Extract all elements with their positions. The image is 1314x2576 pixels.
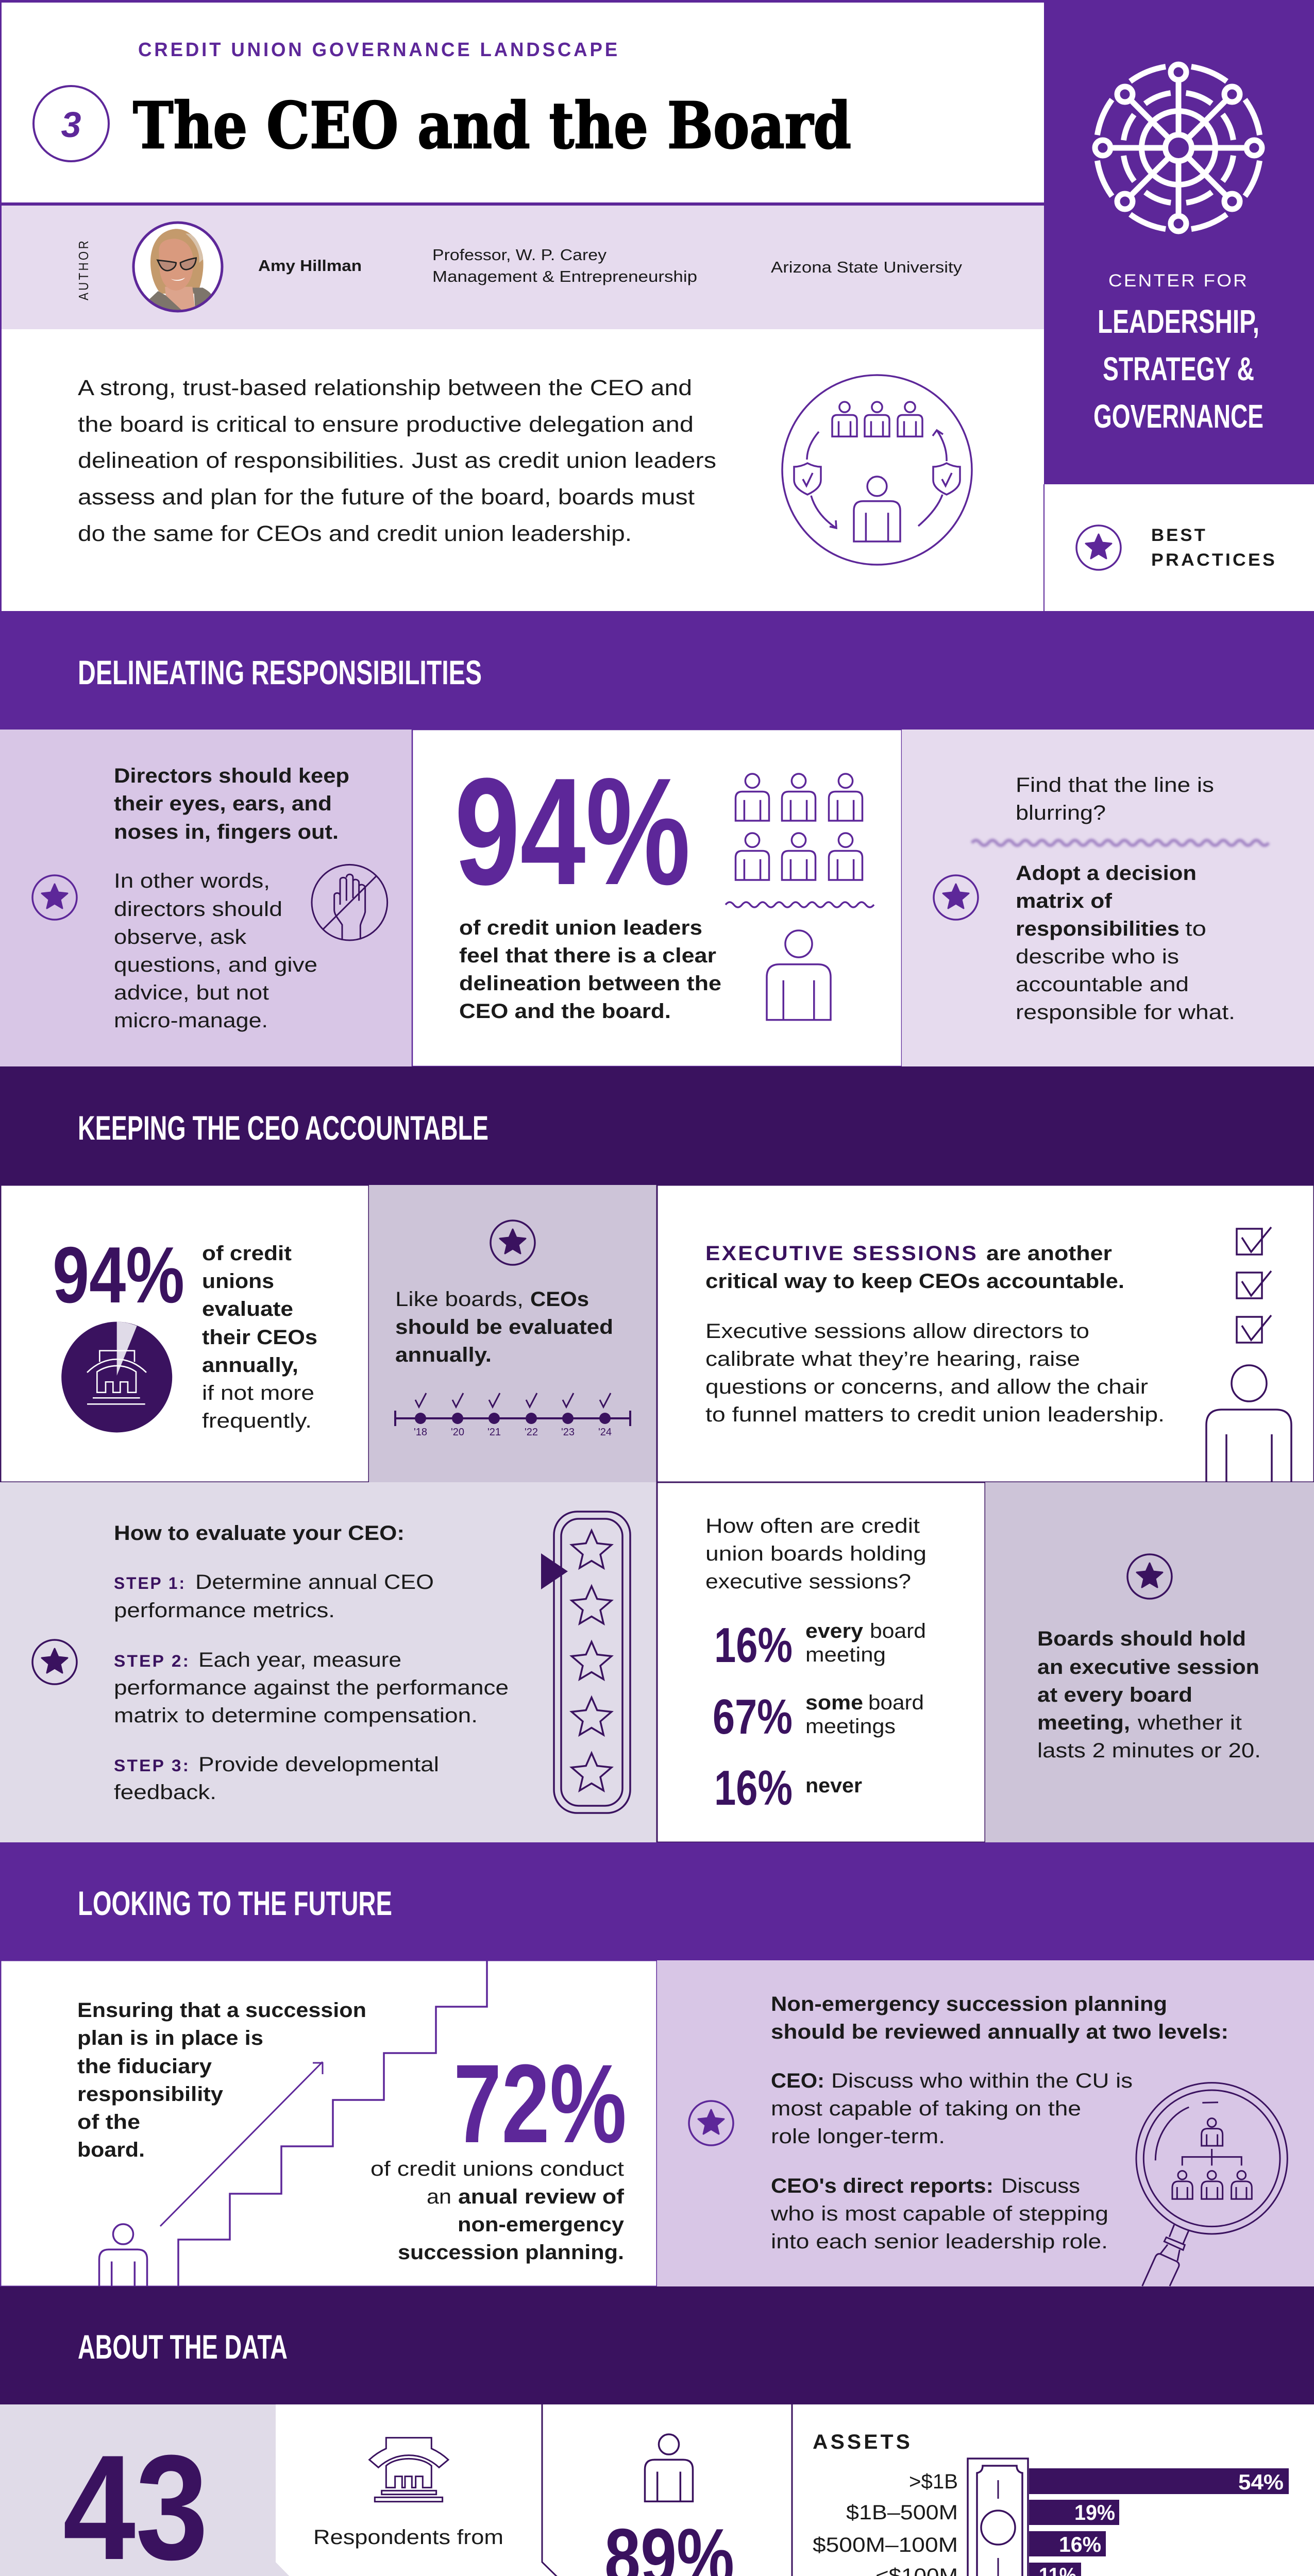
icon: magnifier with org chart (1136, 2083, 1287, 2286)
icon: leadership network logo (1095, 64, 1262, 231)
fiduciary text: plan is in place is (77, 2027, 263, 2049)
fiduciary text: the fiduciary (77, 2055, 212, 2078)
steps text: matrix to determine compensation. (114, 1704, 478, 1727)
stat caption: succession planning. (398, 2241, 624, 2264)
header panel: title (0, 0, 1314, 611)
stat caption: of credit unions conduct (370, 2158, 624, 2180)
stat caption: unions (202, 1270, 274, 1293)
chart labels (813, 2470, 958, 2576)
callout heading: critical way to keep CEOs accountable. (705, 1270, 1124, 1293)
timeline: '21 (487, 1427, 501, 1438)
intro paragraph: delineation of responsibilities. Just as credit union leaders (78, 448, 716, 473)
icon: star badge (1127, 1554, 1172, 1599)
steps text (114, 1522, 509, 1804)
panel: fingers out (0, 730, 412, 1066)
callout text (1016, 862, 1235, 1024)
stat caption: of credit union leaders (459, 917, 702, 939)
stat caption: if not more (202, 1382, 314, 1404)
callout heading: noses in, fingers out. (114, 821, 339, 843)
CEO level text (771, 2070, 1133, 2148)
chart labels: $1B–500M (846, 2501, 958, 2524)
panel: how often executive sessions (657, 1482, 985, 1842)
callout text: In other words, (114, 870, 270, 892)
author title: Professor, W. P. Carey (432, 246, 607, 264)
icon: number 3 badge (33, 86, 109, 161)
fiduciary text: of the (77, 2111, 140, 2133)
legend text (1151, 526, 1277, 570)
panel: how to evaluate your CEO (0, 1482, 657, 1842)
stat caption: non-emergency (458, 2213, 625, 2236)
callout heading: Directors should keep (114, 765, 349, 787)
callout text: at every board (1037, 1684, 1192, 1706)
callout heading: Non-emergency succession planning (771, 1993, 1167, 2015)
callout text: whether it (1137, 1711, 1242, 1734)
stat: 94%: 94% (53, 1230, 184, 1319)
stat caption: an (427, 2185, 451, 2208)
stat: 16% never: never (805, 1774, 862, 1797)
callout text: meeting, (1037, 1711, 1130, 1734)
callout heading (771, 1993, 1228, 2043)
callout text: micro-manage. (114, 1009, 268, 1032)
icon: respondent (645, 2434, 693, 2501)
callout text: Like boards, (395, 1288, 524, 1311)
bar chart (1029, 2468, 1289, 2576)
stat: 72%: 72% (453, 2041, 627, 2166)
panel: assets chart (792, 2431, 1314, 2576)
stat caption: CEO and the board. (459, 1000, 671, 1023)
bar chart: 54% (1238, 2470, 1284, 2494)
section header: keeping the CEO accountable (0, 1066, 1314, 1185)
author strip (2, 206, 1044, 329)
stat: 16% every board meeting: meeting (805, 1643, 886, 1666)
timeline: '22 (525, 1427, 538, 1438)
chart labels: $500M–100M (813, 2534, 958, 2556)
stat: 67% some board meetings (713, 1689, 924, 1744)
fiduciary text: Ensuring that a succession (77, 1999, 366, 2022)
icon: credit union building (369, 2438, 448, 2502)
direct reports text: CEO's direct reports: (771, 2175, 993, 2197)
question: executive sessions? (705, 1570, 911, 1593)
callout heading: should be reviewed annually at two levels: (771, 2021, 1228, 2043)
panel: best practices legend (1043, 484, 1314, 611)
icon: star rating scale (541, 1512, 630, 1813)
stat caption: feel that there is a clear (459, 944, 716, 967)
stat: 67% some board meetings: board (868, 1691, 924, 1714)
question (705, 1515, 926, 1593)
title: The CEO and the Board (133, 89, 851, 163)
timeline: '18 (414, 1427, 427, 1438)
panel: non-emergency succession planning (657, 1960, 1314, 2286)
fiduciary text: responsibility (77, 2083, 224, 2106)
steps text: STEP 2: (114, 1652, 190, 1670)
stat: 94%: 94% (454, 746, 690, 917)
icon: banknote (968, 2459, 1028, 2576)
timeline (395, 1393, 630, 1438)
callout text (1037, 1628, 1261, 1762)
stat: 16% never: 16% (714, 1760, 793, 1816)
fiduciary text (77, 1999, 366, 2161)
stat caption: their CEOs (202, 1326, 317, 1349)
panel: succession plan (1, 1960, 657, 2291)
steps text: performance against the performance (114, 1676, 509, 1699)
callout text (114, 870, 317, 1032)
panel: boards should hold session (985, 1482, 1314, 1842)
callout text: should be evaluated (395, 1316, 613, 1338)
stat caption (459, 917, 721, 1023)
icon: director (1206, 1365, 1291, 1482)
CEO level text: CEO: (771, 2070, 824, 2092)
intro paragraph: the board is critical to ensure productive delegation and (78, 412, 694, 437)
direct reports text: Discuss (1001, 2175, 1080, 2197)
steps text: Each year, measure (198, 1649, 401, 1671)
chart title: ASSETS (813, 2431, 913, 2453)
steps text: STEP 3: (114, 1756, 190, 1775)
section header: keeping the CEO accountable: KEEPING THE CEO ACCOUNTABLE (78, 1109, 488, 1147)
legend text: BEST (1151, 526, 1207, 545)
icon: number 3 badge: 3 (61, 105, 81, 145)
center name: STRATEGY & (1103, 350, 1254, 387)
icon: CEO (767, 930, 831, 1020)
CEO level text: most capable of taking on the (771, 2097, 1081, 2120)
callout text (395, 1288, 613, 1366)
stat caption: evaluate (202, 1298, 293, 1320)
stat: 16% never (714, 1760, 862, 1816)
callout text: annually. (395, 1344, 492, 1366)
panel: executive sessions (657, 1185, 1314, 1482)
callout text: observe, ask (114, 926, 247, 948)
section header: about the data (0, 2286, 1314, 2404)
icon: star badge (1076, 526, 1121, 570)
callout heading (705, 1242, 1124, 1293)
center name: LEADERSHIP, (1098, 303, 1259, 340)
callout text: directors should (114, 898, 282, 921)
section header: delineating responsibilities: DELINEATING RESPONSIBILITIES (78, 653, 482, 691)
intro paragraph: do the same for CEOs and credit union leadership. (78, 521, 632, 546)
chart labels: >$1B (909, 2470, 958, 2493)
intro paragraph: A strong, trust-based relationship between the CEO and (78, 376, 692, 400)
author title: Management & Entrepreneurship (432, 267, 697, 285)
question: union boards holding (705, 1543, 926, 1565)
intro paragraph: assess and plan for the future of the board, boards must (78, 485, 695, 510)
section header: delineating responsibilities (0, 611, 1314, 730)
steps text: Determine annual CEO (195, 1571, 434, 1594)
timeline: '24 (598, 1427, 612, 1438)
icon: no hands (312, 865, 388, 940)
stat caption (370, 2158, 625, 2264)
stat caption: delineation between the (459, 972, 721, 995)
body text: questions or concerns, and allow the chair (705, 1376, 1148, 1398)
direct reports text: who is most capable of stepping (770, 2202, 1108, 2225)
callout question (1016, 774, 1214, 824)
panel: 85 credit unions (276, 2404, 566, 2576)
stat: 16% every board meeting: board (870, 1620, 926, 1642)
panel: decision matrix (902, 730, 1314, 1066)
stat: 67% some board meetings: meetings (805, 1715, 896, 1738)
stat: 67% some board meetings: 67% (713, 1689, 793, 1744)
direct reports text: into each senior leadership role. (771, 2230, 1108, 2253)
callout text: questions, and give (114, 954, 317, 976)
author photo (133, 223, 222, 311)
intro paragraph (78, 376, 716, 546)
arrow: upward (160, 2062, 323, 2226)
panel: evaluate annually (369, 1185, 657, 1482)
icon: person at stairs (99, 2224, 147, 2291)
body text: to funnel matters to credit union leadership. (705, 1403, 1165, 1426)
body text: Executive sessions allow directors to (705, 1320, 1089, 1343)
section header: looking to the future (0, 1842, 1314, 1960)
direct reports text (770, 2175, 1108, 2253)
callout text: to (1185, 918, 1206, 940)
CEO level text: role longer-term. (771, 2125, 945, 2148)
icon: star badge (934, 875, 978, 920)
callout heading: are another (986, 1242, 1112, 1265)
icon: CEO and board cycle (782, 375, 972, 565)
panel: 94 percent evaluate CEOs (1, 1185, 369, 1482)
eyebrow: CREDIT UNION GOVERNANCE LANDSCAPE (138, 39, 620, 61)
callout text: Adopt a decision (1016, 862, 1197, 885)
center name: CENTER FOR (1108, 271, 1249, 291)
callout text: matrix of (1016, 890, 1113, 912)
callout question: blurring? (1016, 802, 1106, 824)
stat caption: annually, (202, 1354, 298, 1377)
callout text: CEOs (530, 1288, 589, 1311)
steps text: Provide developmental (198, 1753, 439, 1776)
icon: stairs (178, 1960, 487, 2286)
callout text: accountable and (1016, 973, 1189, 996)
body text: calibrate what they’re hearing, raise (705, 1348, 1080, 1370)
callout text: responsible for what. (1016, 1001, 1235, 1024)
callout heading: EXECUTIVE SESSIONS (705, 1242, 978, 1265)
section header: looking to the future: LOOKING TO THE FUTURE (78, 1884, 392, 1922)
bar chart: 16% (1059, 2532, 1101, 2556)
stat caption: frequently. (202, 1410, 312, 1432)
stat: 67% some board meetings: some (805, 1691, 863, 1714)
callout heading (114, 765, 349, 843)
callout text: an executive session (1037, 1656, 1259, 1679)
callout text: Boards should hold (1037, 1628, 1246, 1650)
author label: AUTHOR (76, 239, 91, 300)
callout question: Find that the line is (1016, 774, 1214, 796)
steps text: performance metrics. (114, 1599, 335, 1622)
steps text: How to evaluate your CEO: (114, 1522, 405, 1545)
callout text: responsibilities (1016, 918, 1180, 940)
timeline: '23 (561, 1427, 575, 1438)
icon: checklist (1237, 1227, 1271, 1343)
author name: Amy Hillman (258, 257, 362, 275)
center name (1093, 271, 1264, 435)
bar chart: 19% (1074, 2500, 1115, 2524)
icon: star badge (32, 1640, 77, 1684)
stat: 16% every board meeting: 16% (714, 1618, 793, 1673)
icon: star badge (32, 875, 77, 920)
panel: respondent roles (583, 2404, 792, 2576)
callout text: describe who is (1016, 945, 1179, 968)
timeline: '20 (451, 1427, 464, 1438)
label: Respondents from (313, 2526, 503, 2549)
question: How often are credit (705, 1515, 920, 1537)
icon: six board members (726, 774, 874, 907)
stat caption: of credit (202, 1242, 292, 1265)
pie chart: 94 percent (61, 1322, 172, 1432)
icon: star badge (491, 1221, 535, 1265)
steps text: feedback. (114, 1781, 216, 1804)
callout heading: their eyes, ears, and (114, 792, 332, 815)
CEO level text: Discuss who within the CU is (831, 2070, 1133, 2092)
blurred wave (972, 840, 1269, 845)
stat: 16% every board meeting (714, 1618, 926, 1673)
panel: 43 question survey (0, 2404, 299, 2576)
icon: star badge (689, 2101, 733, 2145)
panel: 94 percent clear delineation (412, 730, 902, 1066)
author affiliation: Arizona State University (771, 258, 963, 276)
author title (432, 246, 697, 285)
legend text: PRACTICES (1151, 550, 1277, 570)
stat caption (202, 1242, 317, 1432)
stat: 16% every board meeting: every (805, 1620, 864, 1642)
callout text: advice, but not (114, 981, 269, 1004)
stat caption: anual review of (458, 2185, 625, 2208)
section header: about the data: ABOUT THE DATA (78, 2328, 288, 2366)
body text (705, 1320, 1165, 1426)
callout text: lasts 2 minutes or 20. (1037, 1739, 1261, 1762)
fiduciary text: board. (77, 2139, 145, 2161)
steps text: STEP 1: (114, 1574, 186, 1592)
panel: center for leadership (1044, 0, 1314, 484)
